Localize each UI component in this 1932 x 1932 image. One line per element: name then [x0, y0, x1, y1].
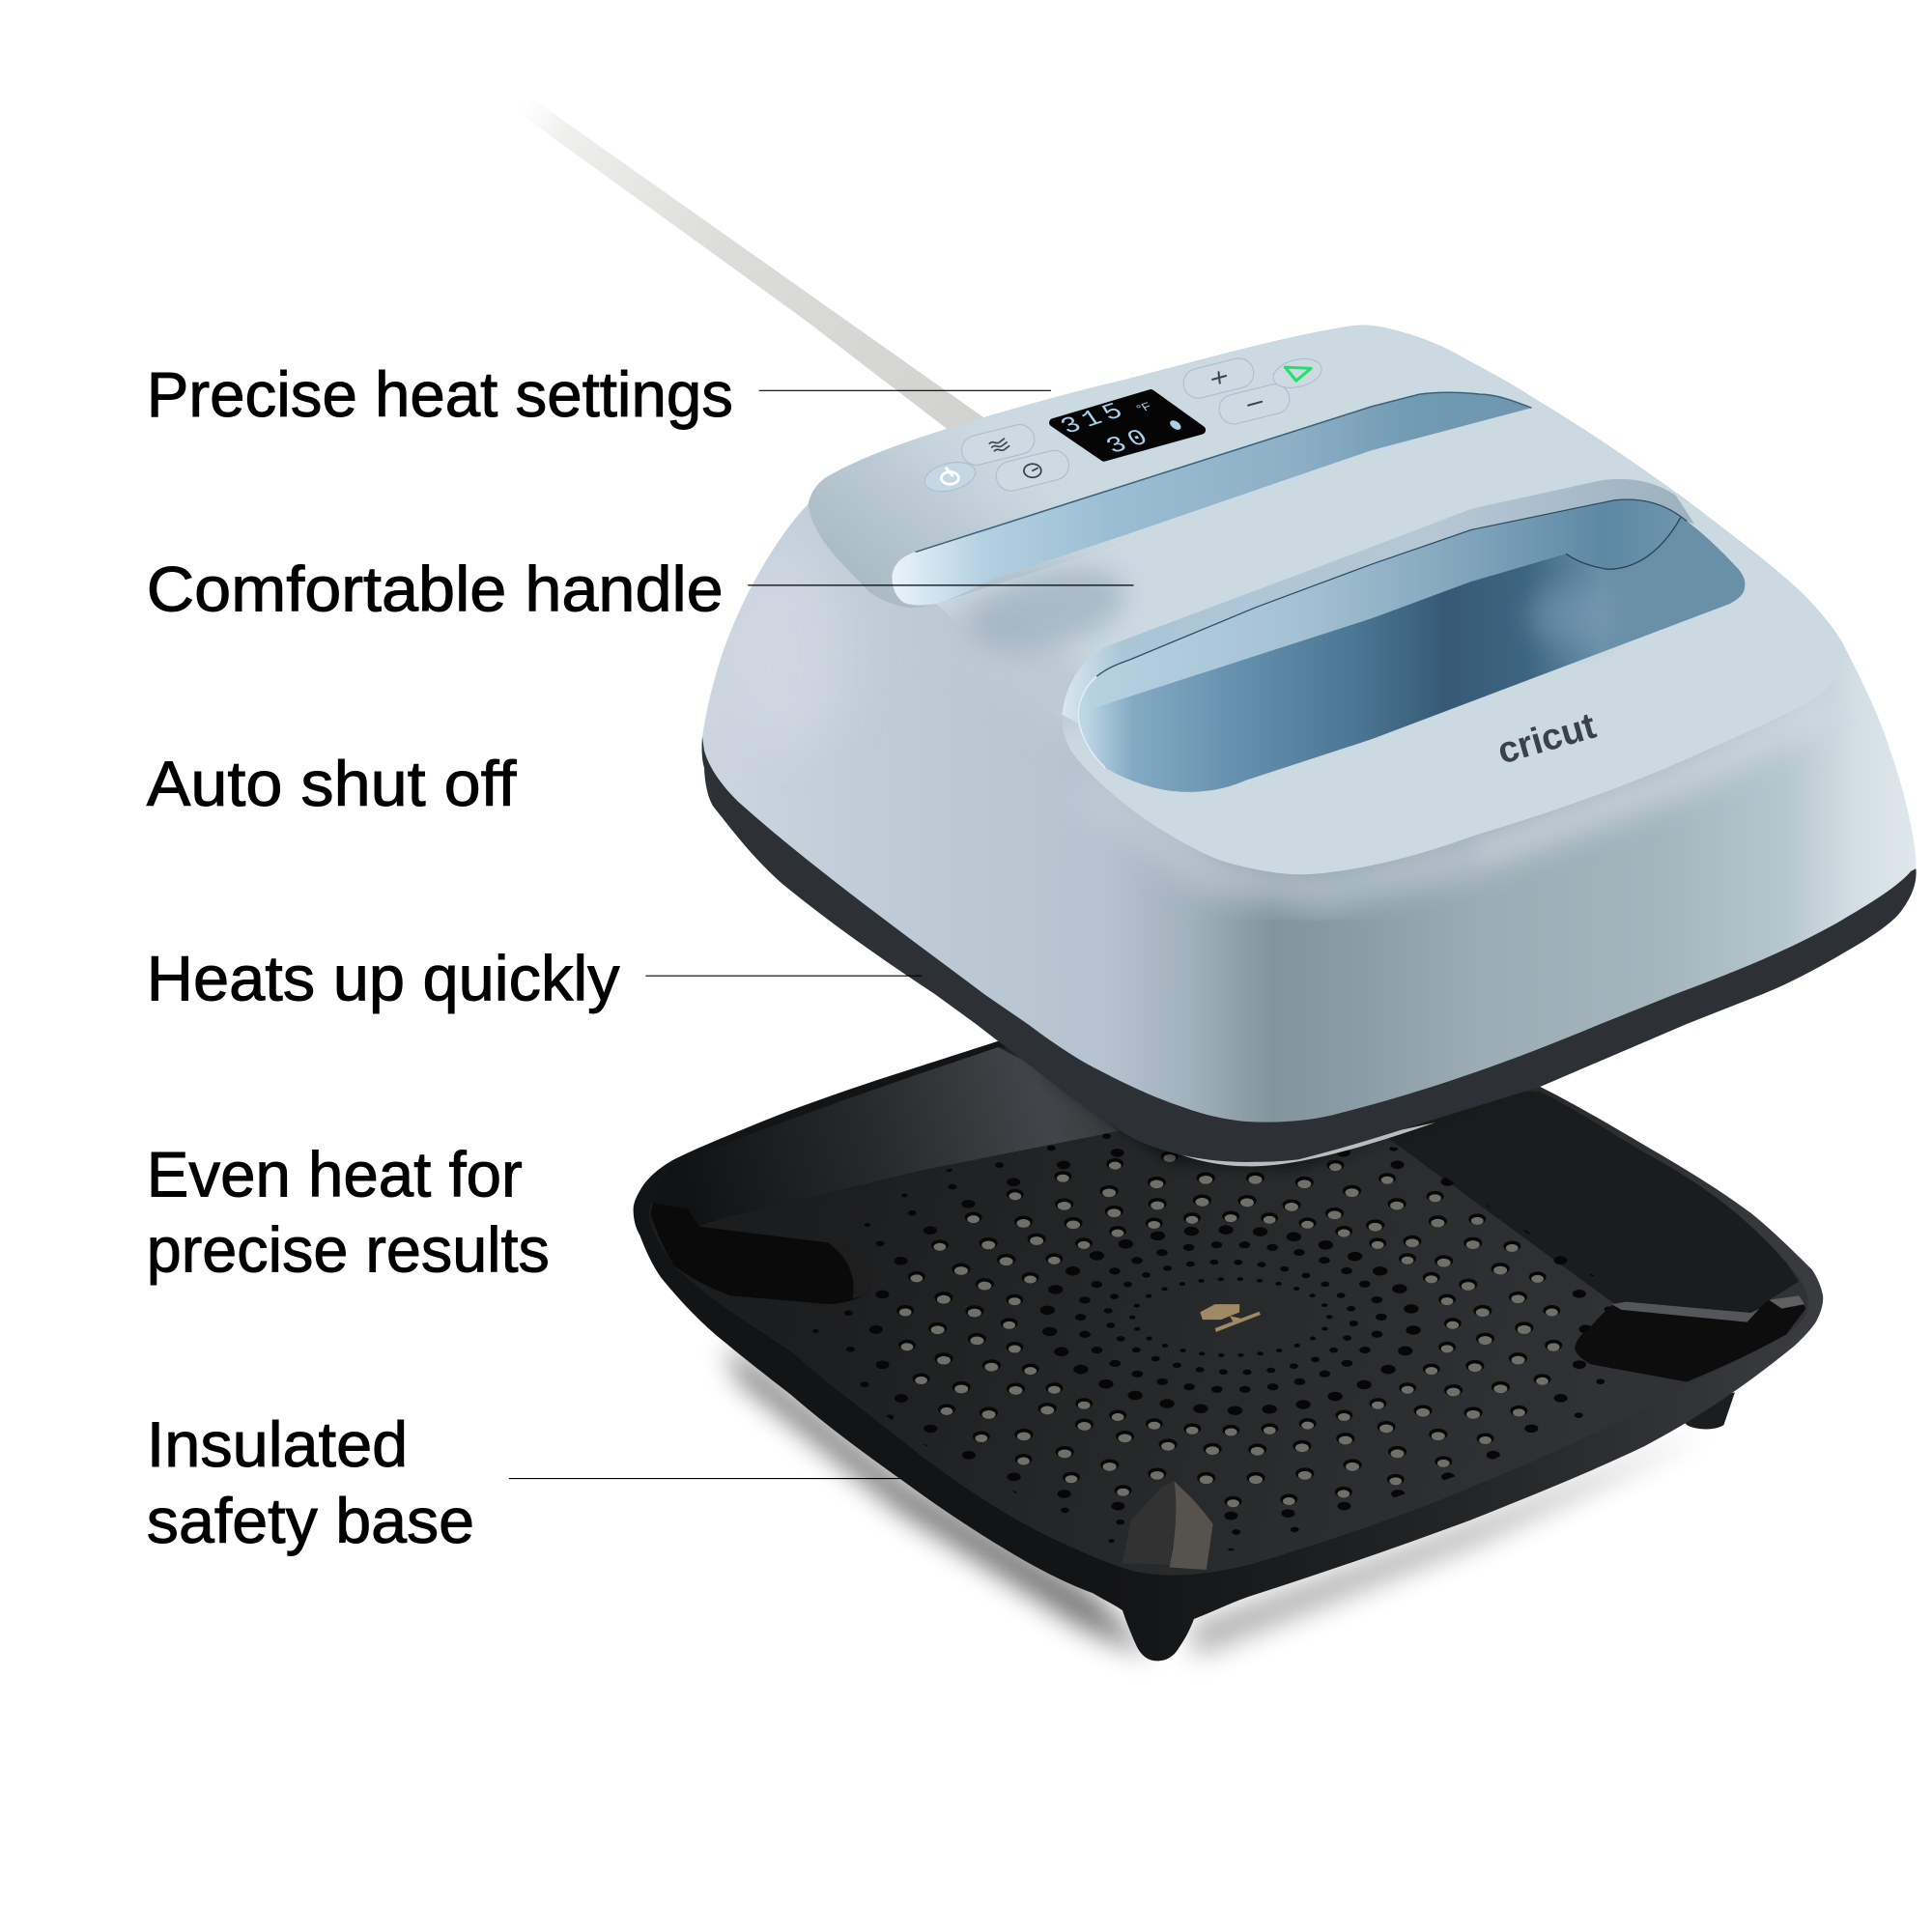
callout: auto shut off: Auto shut off	[147, 749, 517, 819]
control panel shading	[808, 442, 1047, 608]
handle lip band	[1062, 479, 1694, 727]
callout: even heat for precise results: Even heat for	[147, 1140, 523, 1210]
silver plate sliver	[1164, 1122, 1435, 1166]
time readout: 30	[1101, 425, 1154, 460]
tray outer shell	[634, 1041, 1823, 1661]
front hand opening	[1062, 479, 1745, 792]
power cord	[513, 99, 985, 431]
tray back-right wall	[1355, 1084, 1799, 1321]
callout: precise heat settings: Precise heat settings	[147, 359, 733, 430]
callout: insulated safety base	[147, 1409, 903, 1556]
plus button	[1180, 355, 1257, 401]
face highlights	[727, 554, 1824, 890]
front corner post	[1122, 1481, 1213, 1570]
handle shadow	[960, 554, 1134, 667]
play icon	[1285, 367, 1311, 381]
recess	[1077, 499, 1745, 792]
callout: insulated safety base: Insulated	[147, 1409, 408, 1480]
power icon	[941, 469, 958, 484]
left corner post	[650, 1203, 872, 1304]
safety base tray	[634, 1041, 1823, 1661]
status icon	[1168, 418, 1182, 432]
dark bottom rim	[702, 737, 1917, 1162]
brand name: cricut	[1492, 705, 1601, 772]
minus button	[1216, 382, 1293, 427]
callout: even heat for precise results: precise results	[147, 1214, 550, 1285]
callout: heats up quickly: Heats up quickly	[147, 944, 620, 1014]
top surface	[809, 326, 1845, 874]
recess glow	[1526, 586, 1615, 645]
heat press body	[702, 326, 1917, 1166]
heat plate shadow on tray	[1023, 1060, 1540, 1171]
tray drop shadow right	[1189, 1430, 1713, 1658]
callout: comfortable handle: Comfortable handle	[147, 554, 724, 625]
plus icon	[1212, 372, 1226, 384]
tray inner floor	[649, 1047, 1808, 1576]
perforated hole pattern	[815, 1111, 1646, 1550]
handle underside	[1088, 499, 1681, 708]
unit readout: °F	[1133, 400, 1154, 415]
tray back-left wall	[653, 1047, 1119, 1226]
power button	[922, 458, 979, 497]
callout: even heat for precise results	[147, 1140, 550, 1285]
minus icon	[1248, 402, 1262, 406]
center logo mark	[1200, 1304, 1261, 1332]
right corner post	[1575, 1295, 1805, 1381]
rear hand opening	[892, 392, 1531, 605]
tray back foot	[1669, 1392, 1735, 1429]
timer icon	[1024, 464, 1041, 477]
control buttons	[922, 355, 1324, 497]
display	[1054, 394, 1202, 460]
callout: insulated safety base: safety base	[147, 1486, 474, 1556]
button glyphs	[941, 367, 1311, 484]
heat button	[958, 421, 1037, 469]
heat icon	[989, 439, 1009, 451]
tray drop shadow left	[725, 1343, 1152, 1658]
temperature readout: 315	[1056, 399, 1129, 440]
shell	[702, 326, 1916, 1122]
start button	[1270, 355, 1324, 392]
handle root blend	[918, 591, 1115, 739]
timer button	[993, 447, 1072, 494]
